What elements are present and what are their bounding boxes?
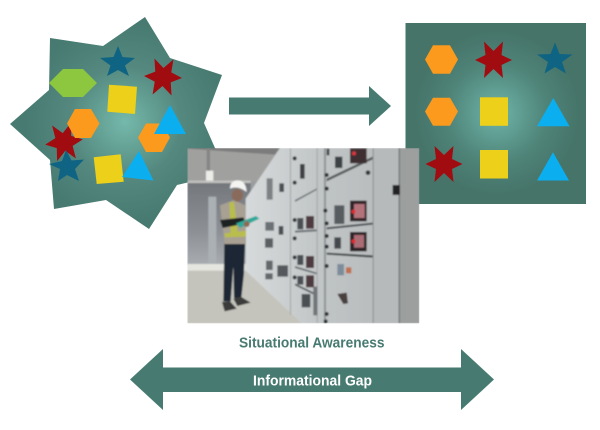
icon: blue triangle upper [154,105,186,134]
photo: engineer inspecting switchgear panels [187,148,419,323]
arrow: chaos to order [229,86,391,126]
square background [406,23,586,204]
icon: orange hexagon left [67,109,100,138]
icon: red star row 1 [475,42,512,78]
panel: ordered square of shapes [406,23,586,204]
arrow shape [130,349,494,410]
icon: yellow square row 2 [480,97,508,126]
icon: blue star left [49,150,84,181]
label: Informational Gap: Informational Gap [253,372,372,390]
icon: yellow square bottom [94,154,124,184]
label: Situational Awareness: Situational Awareness [239,334,384,352]
icon: orange hexagon row 2 [425,98,458,126]
panel: chaotic star of mixed shapes [10,17,232,229]
icon: yellow square row 3 [480,150,508,178]
icon: red star row 3 [426,146,462,182]
icon: blue triangle lower [122,151,154,180]
icon: orange hexagon row 1 [425,45,458,74]
icon: blue triangle row 3 [537,152,569,180]
icon: orange hexagon right [138,124,170,152]
icon: green hexagon [49,69,97,97]
icon: blue star row 1 [537,42,572,74]
icon: red star left [43,122,85,162]
icon: red star top [143,58,183,96]
icon: blue star top [100,46,135,76]
star background [10,17,232,229]
double arrow: informational gap [130,349,494,410]
icon: yellow square top [107,85,137,114]
worker [223,244,245,301]
icon: blue triangle row 2 [537,98,570,126]
